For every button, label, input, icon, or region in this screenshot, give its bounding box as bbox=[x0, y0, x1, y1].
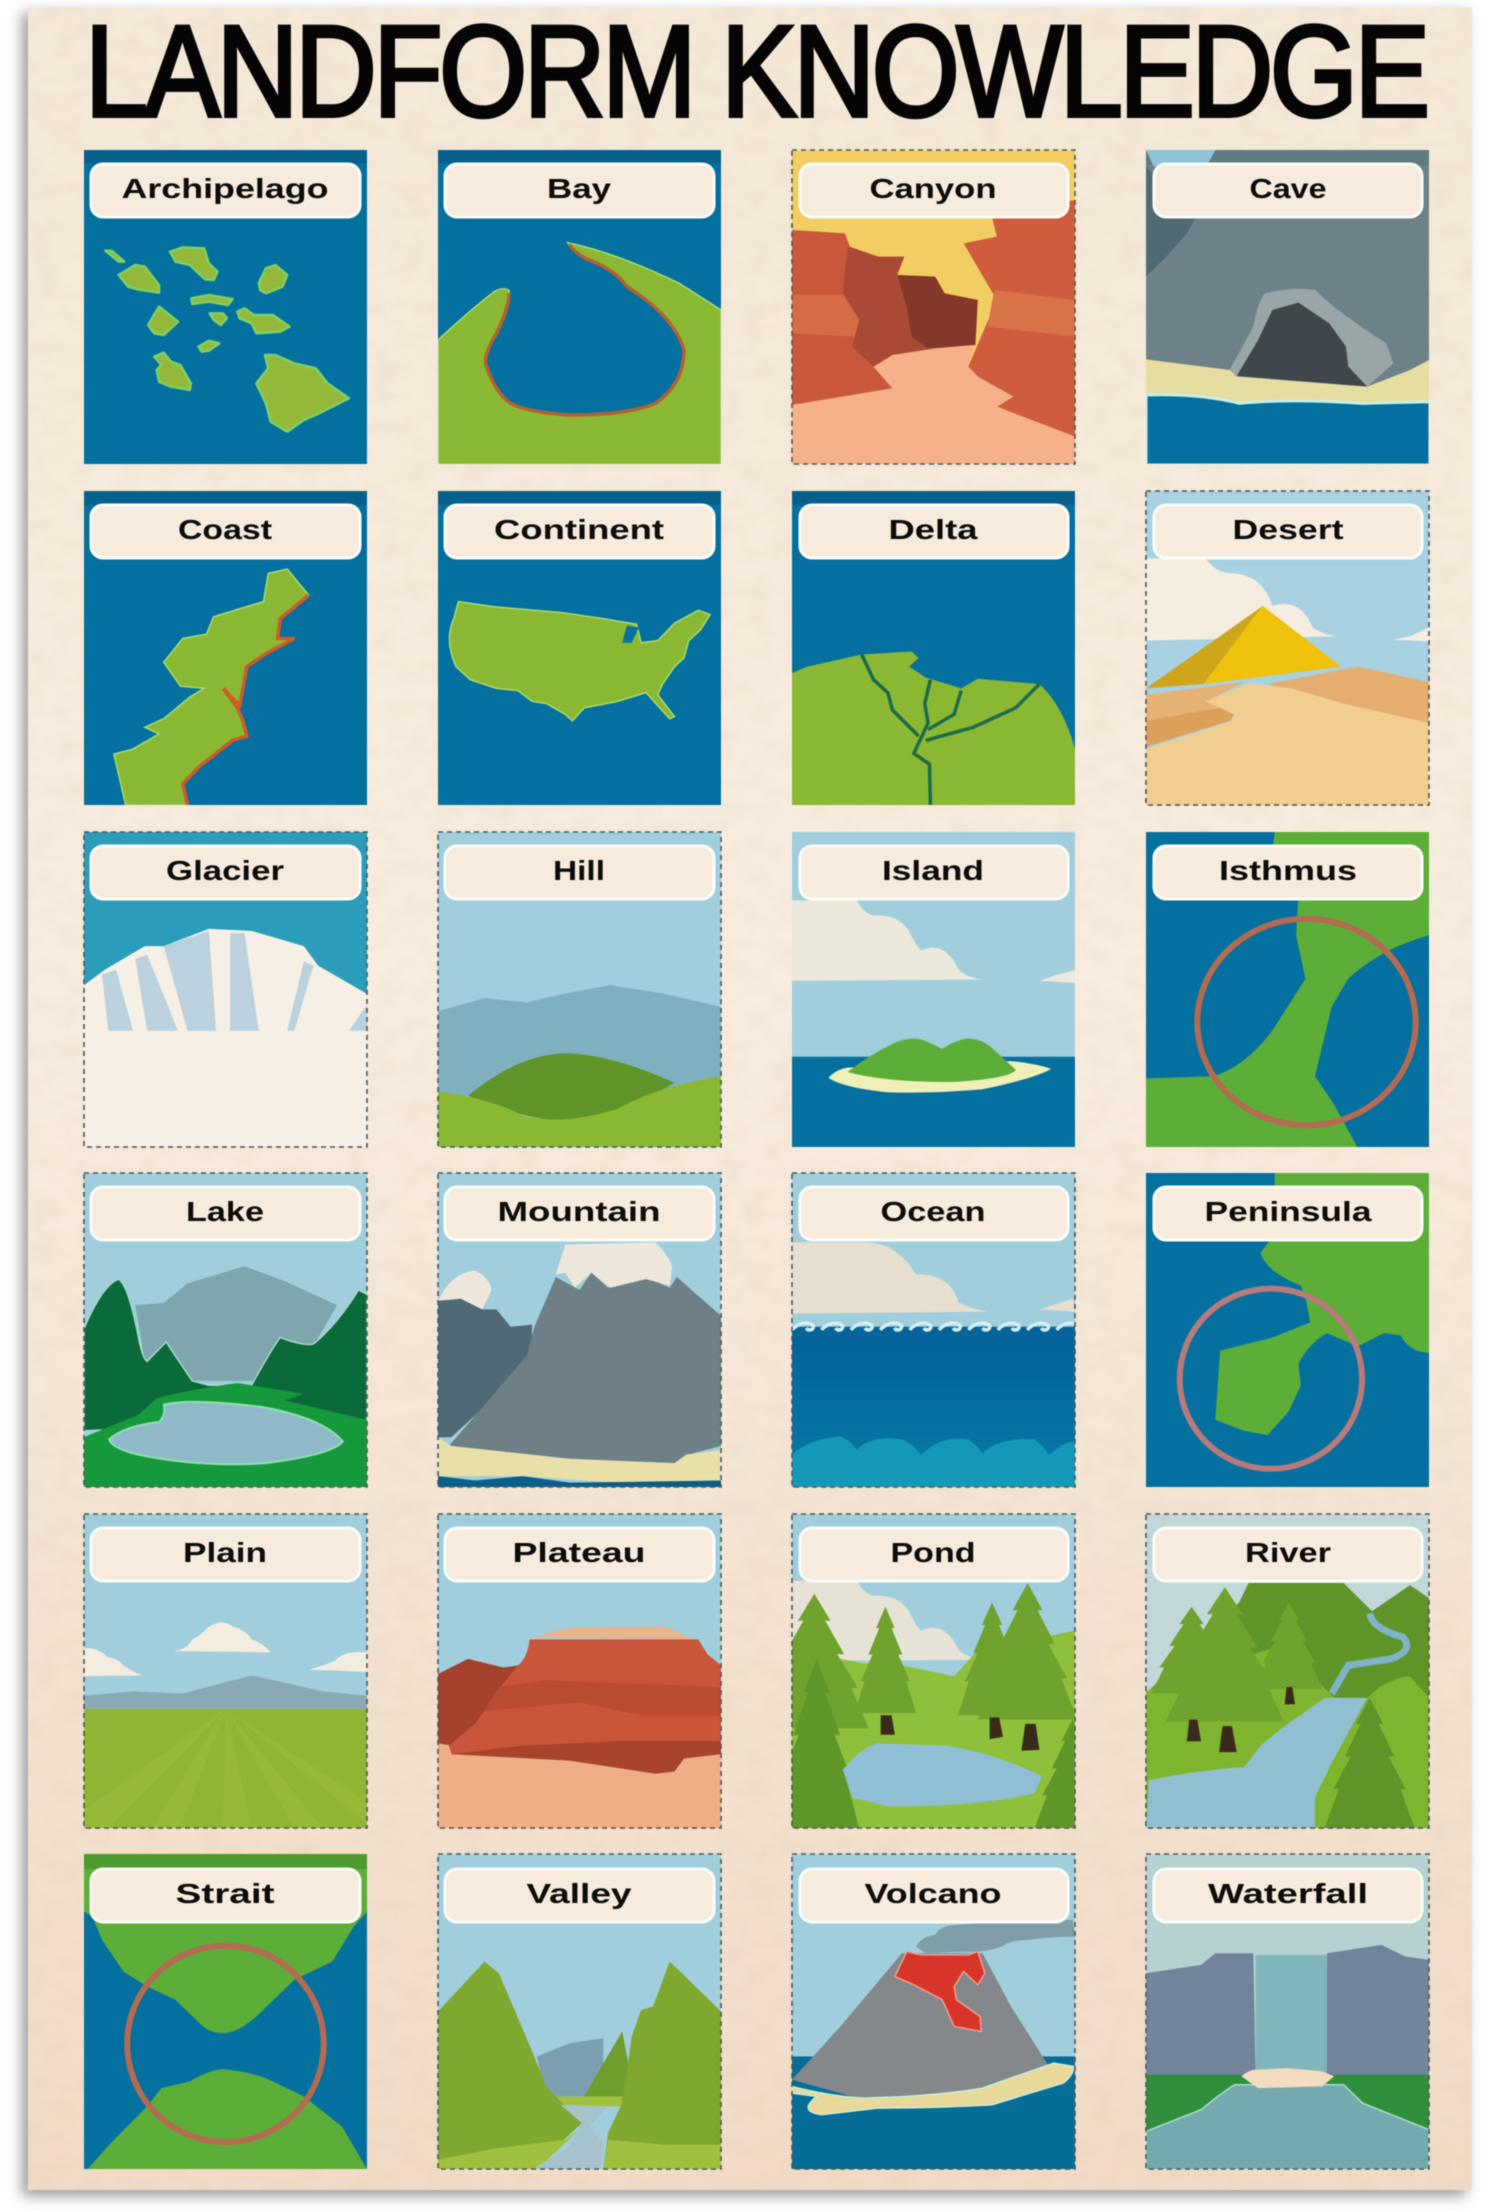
panel: Waterfall bbox=[1146, 1854, 1429, 2170]
label: Ocean bbox=[800, 1187, 1068, 1240]
panel: Volcano bbox=[792, 1854, 1075, 2170]
label: Hill bbox=[445, 846, 714, 899]
illustration: island bbox=[791, 832, 1076, 1148]
illustration: forest river bbox=[1145, 1514, 1430, 1829]
label: River: River bbox=[1245, 1537, 1331, 1568]
panel: Continent bbox=[438, 491, 721, 805]
label: Peninsula: Peninsula bbox=[1204, 1196, 1372, 1227]
label: Delta: Delta bbox=[888, 514, 978, 545]
label: Delta bbox=[800, 505, 1068, 558]
panel: Peninsula bbox=[1146, 1173, 1429, 1487]
illustration: river valley bbox=[437, 1854, 722, 2170]
label: Glacier: Glacier bbox=[166, 855, 284, 886]
panel: Archipelago bbox=[84, 150, 367, 464]
illustration: coastline map bbox=[83, 490, 368, 806]
label: Peninsula bbox=[1154, 1187, 1422, 1240]
title: LANDFORM KNOWLEDGE bbox=[85, 0, 1430, 144]
label: Waterfall bbox=[1154, 1869, 1422, 1922]
label: Isthmus bbox=[1154, 846, 1422, 899]
illustration: ocean waves bbox=[791, 1172, 1076, 1488]
label: Ocean: Ocean bbox=[880, 1196, 986, 1227]
illustration: strait map with ring bbox=[83, 1853, 368, 2170]
panel: Pond bbox=[760, 1514, 1111, 1828]
panel: Plateau bbox=[438, 1514, 721, 1828]
panel: Cave bbox=[1146, 150, 1430, 465]
illustration: green plain bbox=[83, 1514, 368, 1829]
panel: Lake bbox=[84, 1173, 367, 1487]
illustration: river delta bbox=[791, 490, 1076, 806]
label: Cave bbox=[1154, 164, 1422, 217]
panel: Bay bbox=[438, 150, 721, 464]
panel: Desert bbox=[1146, 491, 1429, 805]
illustration: mountain lake bbox=[83, 1172, 368, 1488]
illustration: sea cave bbox=[1145, 149, 1430, 464]
label: Continent bbox=[445, 505, 714, 558]
label: Plain bbox=[91, 1528, 360, 1581]
label: Island: Island bbox=[882, 855, 984, 886]
label: Valley bbox=[445, 1869, 714, 1922]
panel: Coast bbox=[84, 491, 367, 805]
label: Volcano: Volcano bbox=[864, 1878, 1002, 1909]
label: Waterfall: Waterfall bbox=[1208, 1878, 1368, 1909]
panel: Canyon bbox=[792, 150, 1075, 464]
label: Archipelago bbox=[91, 164, 360, 217]
label: Bay: Bay bbox=[547, 173, 612, 204]
label: Strait bbox=[91, 1869, 360, 1922]
label: Coast bbox=[91, 505, 360, 558]
panel: Ocean bbox=[792, 1173, 1075, 1487]
label: Desert bbox=[1154, 505, 1422, 558]
label: Island bbox=[800, 846, 1068, 899]
label: River bbox=[1154, 1528, 1422, 1581]
label: Archipelago: Archipelago bbox=[122, 173, 328, 204]
label: Pond bbox=[800, 1528, 1068, 1581]
illustration: snowy mountains bbox=[437, 1172, 722, 1488]
illustration: continent map bbox=[437, 490, 722, 806]
illustration: glacier bbox=[83, 831, 368, 1147]
illustration: erupting volcano bbox=[791, 1854, 1076, 2170]
panel: River bbox=[1146, 1514, 1429, 1828]
illustration: forest pond bbox=[791, 1514, 1076, 1829]
label: Valley: Valley bbox=[526, 1878, 632, 1909]
label: Continent: Continent bbox=[494, 514, 664, 545]
label: Pond: Pond bbox=[890, 1537, 976, 1568]
label: Glacier bbox=[91, 846, 360, 899]
label: Strait: Strait bbox=[176, 1878, 274, 1909]
panel: Delta bbox=[792, 491, 1075, 805]
label: Plain: Plain bbox=[183, 1537, 267, 1568]
panel: Mountain bbox=[438, 1173, 721, 1487]
illustration: desert pyramid and dunes bbox=[1145, 490, 1430, 806]
label: Canyon: Canyon bbox=[870, 173, 996, 204]
panel: Isthmus bbox=[1146, 832, 1429, 1148]
illustration: plateau bbox=[437, 1514, 722, 1828]
label: Canyon bbox=[800, 164, 1068, 217]
panel: Island bbox=[792, 832, 1075, 1148]
label: Isthmus: Isthmus bbox=[1219, 855, 1357, 886]
illustration: hill bbox=[437, 832, 722, 1148]
panel: Glacier bbox=[84, 832, 367, 1148]
label: Hill: Hill bbox=[553, 855, 605, 886]
label: Mountain bbox=[445, 1187, 714, 1240]
label: Cave: Cave bbox=[1250, 173, 1326, 204]
panel: Strait bbox=[84, 1854, 367, 2169]
label: Plateau bbox=[445, 1528, 714, 1581]
label: Lake: Lake bbox=[186, 1196, 264, 1227]
label: Mountain: Mountain bbox=[498, 1196, 660, 1227]
illustration: bay bbox=[437, 149, 722, 465]
illustration: canyon bbox=[791, 149, 1076, 464]
panel: Valley bbox=[438, 1854, 721, 2170]
illustration: island chain bbox=[83, 149, 368, 465]
label: Bay bbox=[445, 164, 714, 217]
label: Plateau: Plateau bbox=[512, 1537, 646, 1568]
label: Lake bbox=[91, 1187, 360, 1240]
label: Coast: Coast bbox=[178, 514, 272, 545]
label: Desert: Desert bbox=[1232, 514, 1344, 545]
panel: Plain bbox=[84, 1514, 367, 1828]
illustration: peninsula map with ring bbox=[1145, 1172, 1430, 1488]
illustration: isthmus map with ring bbox=[1145, 831, 1430, 1148]
illustration: waterfall bbox=[1145, 1854, 1430, 2170]
label: Volcano bbox=[800, 1869, 1068, 1922]
panel: Hill bbox=[438, 832, 721, 1148]
